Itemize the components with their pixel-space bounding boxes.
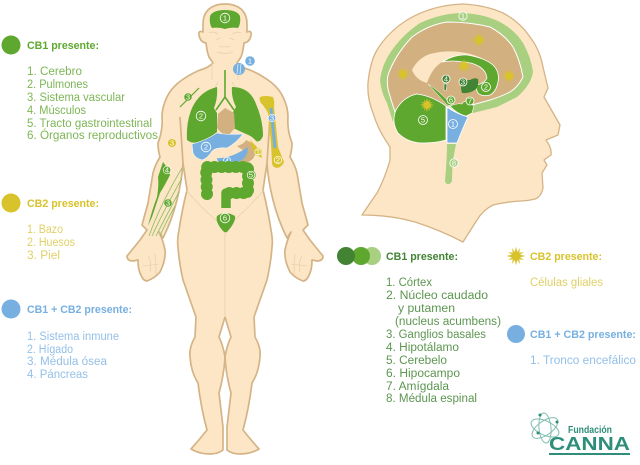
badge: skin (168, 138, 176, 148)
legend: CB2 brain (507, 247, 603, 289)
organ: pancreas: 4 (225, 156, 229, 166)
organ: stomach (236, 140, 255, 164)
list: CB1 organs: 6. Órganos reproductivos (27, 129, 158, 142)
cerebellum (394, 94, 446, 143)
swatch: CB1 (2, 36, 20, 54)
amygdala (450, 97, 474, 116)
peach ventricle (412, 51, 485, 83)
logo bar (549, 453, 630, 455)
organ: heart (217, 108, 235, 137)
organ: reproductive (217, 213, 235, 232)
hippocampus (428, 84, 455, 106)
body outline: viewer's right half (217, 4, 323, 454)
list: CB2 organs: 1. Bazo (27, 224, 63, 236)
organ: intestine: 5 (249, 170, 253, 180)
organ: immune node (233, 56, 255, 75)
arm muscle (148, 162, 171, 226)
organ: intestine (206, 167, 256, 208)
list: CB1 organs: 4. Músculos (27, 105, 86, 117)
heading: CB1 presente: CB1 presente: (27, 40, 99, 52)
heading: CB2 presente brain: CB2 presente: (530, 251, 602, 263)
list: CB1 + CB2 organs: 3. Médula ósea (27, 356, 108, 368)
icon: star swatch (507, 247, 525, 265)
swatch: blue (507, 325, 525, 343)
human body figure (127, 4, 323, 454)
legend: CB1 + CB2 brain (507, 325, 636, 367)
swatches: three greens (337, 247, 381, 265)
icon: atom (528, 413, 562, 443)
organ: lungs: 2 (199, 112, 203, 121)
amygdala: 7 (468, 97, 472, 106)
cortex label (459, 12, 467, 21)
list: CB1 + CB2 organs: 1. Sistema inmune (27, 331, 119, 343)
list: brain regions: 1. Córtex (386, 277, 432, 289)
heading: CB2 presente: CB2 presente: (27, 198, 99, 210)
text: glial cells: Células gliales (530, 277, 603, 289)
legend: CB1 brain (337, 247, 501, 405)
organ: liver: 2 (204, 143, 208, 152)
list: CB1 + CB2 organs: 4. Páncreas (27, 369, 88, 381)
organ: brain: 1 (223, 14, 227, 23)
list: brain regions: 2. Núcleo caudado (386, 290, 488, 302)
organ: pancreas (217, 147, 248, 166)
list: CB1 organs: 1. Cerebro (27, 66, 82, 78)
organ: reproductive: 6 (223, 214, 227, 223)
legend: CB2 body (2, 194, 99, 262)
heading: CB1 + CB2 presente: CB1 + CB2 presente: (27, 304, 132, 316)
spinal cord: 8 (452, 159, 456, 168)
vessel on shoulder: 3 (186, 92, 190, 102)
swatch: CB1 + CB2 (2, 300, 20, 318)
organ: humerus bone: 3 (270, 114, 274, 122)
list: brain regions: 5. Cerebelo (386, 355, 447, 367)
list: CB2 organs: 3. Piel (27, 250, 60, 262)
list: brain regions: y putamen (398, 303, 455, 315)
hypothalamus: 4 (444, 75, 448, 84)
list: brain regions: 4. Hipotálamo (386, 342, 459, 354)
list: CB2 organs (27, 224, 75, 262)
organ: spleen (250, 140, 262, 158)
basal ganglia: 3 (461, 78, 465, 87)
cortex label: 1 (461, 12, 465, 21)
list: CB1 organs: 5. Tracto gastrointestinal (27, 118, 152, 130)
arm vessels: 3 (166, 198, 170, 208)
heading: CB1 presente brain: CB1 presente: (386, 251, 458, 263)
heading: CB1 + CB2 presente brain: CB1 + CB2 presente: (530, 329, 636, 341)
list: CB1 organs (27, 66, 158, 142)
caudate nucleus: 2 (484, 83, 488, 92)
vessel on shoulder (180, 88, 199, 107)
logo: Fundación CANNA (528, 413, 630, 455)
list: brain regions: (nucleus acumbens) (395, 316, 501, 328)
glial stars (396, 33, 516, 112)
swatch: CB2 (2, 194, 20, 212)
list: brain regions: 8. Médula espinal (386, 393, 477, 405)
arm muscle: 4 (165, 166, 169, 174)
text: brainstem: 1. Tronco encefálico (530, 355, 636, 367)
brainstem: 1 (451, 120, 455, 129)
list: brain regions: 7. Amígdala (386, 381, 450, 393)
list: brain regions: 6. Hipocampo (386, 368, 460, 380)
cortex ring (380, 13, 533, 122)
list: CB1 + CB2 organs: 2. Hígado (27, 344, 73, 356)
basal ganglia (459, 78, 478, 93)
wordmark: Fundación (568, 425, 612, 436)
list: brain regions: 3. Ganglios basales (386, 329, 486, 341)
organ: humerus bone: 2 (276, 156, 280, 164)
wordmark: CANNA: CANNA (549, 434, 630, 454)
arm vessels (149, 168, 182, 236)
organ: spleen: 1 (256, 148, 260, 156)
head silhouette (362, 4, 560, 242)
head cross-section (362, 4, 560, 242)
caudate nucleus (442, 55, 498, 96)
brainstem (447, 107, 468, 143)
organ: lungs (187, 70, 263, 143)
brain tan mass (387, 22, 523, 112)
list: brain regions (386, 277, 501, 405)
organ: liver (192, 133, 243, 160)
hypothalamus (442, 75, 450, 91)
list: CB1 organs: 2. Pulmones (27, 79, 88, 91)
organ: brain (210, 10, 240, 29)
body outline: viewer's left half (127, 4, 233, 454)
legend: CB1 + CB2 body (2, 300, 132, 381)
hippocampus: 6 (449, 96, 453, 105)
organ: humerus bone (260, 96, 284, 168)
list: CB1 + CB2 organs (27, 331, 119, 381)
spinal cord (445, 144, 458, 184)
list: CB2 organs: 2. Huesos (27, 237, 75, 249)
badge: skin: 3 (170, 138, 174, 148)
legend: CB1 body (2, 36, 158, 142)
organ: immune node: 1 (248, 57, 252, 66)
list: CB1 organs: 3. Sistema vascular (27, 92, 125, 104)
cerebellum: 5 (421, 116, 425, 125)
